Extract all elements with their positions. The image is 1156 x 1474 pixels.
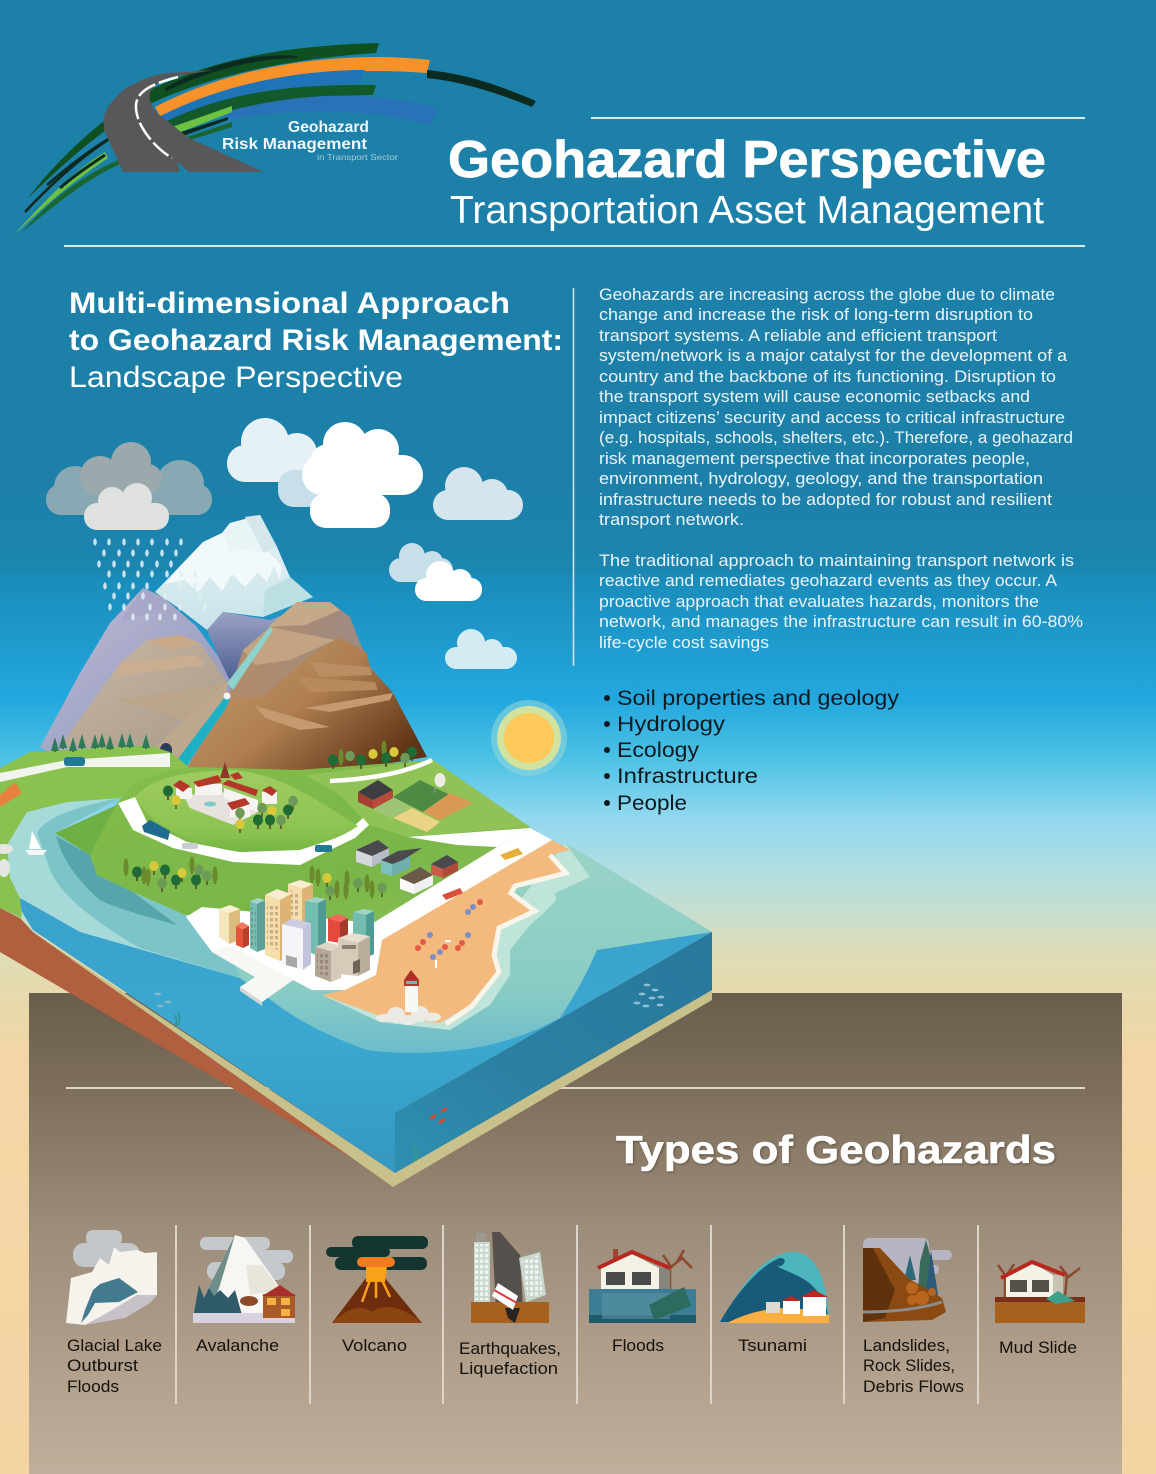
river deep channel bbox=[56, 836, 177, 925]
mountain: snow peak bbox=[155, 515, 313, 630]
heading: multi-dimensional approach bbox=[69, 287, 563, 394]
text block: introduction paragraphs: impact citizens’ security and access to critical infrastructure bbox=[599, 409, 1065, 427]
mountain: brown front bbox=[187, 637, 427, 777]
sailboat bbox=[25, 831, 47, 855]
icon: volcano bbox=[326, 1236, 428, 1323]
hilltop estate bbox=[173, 762, 277, 825]
waterfall bbox=[173, 627, 273, 775]
hazard: landslides bbox=[863, 1238, 964, 1396]
hazard: avalanche bbox=[193, 1235, 296, 1355]
bullet list: dimensions bbox=[604, 687, 900, 815]
vehicles bbox=[64, 757, 523, 900]
road: upper left bbox=[0, 753, 170, 782]
mountain: brown back bbox=[190, 602, 367, 770]
water tower bbox=[434, 773, 446, 793]
icon: landslide bbox=[863, 1238, 952, 1322]
icon: earthquake buildings bbox=[471, 1232, 549, 1323]
hazard: tsunami bbox=[720, 1252, 829, 1355]
hazard column dividers bbox=[176, 1225, 978, 1404]
hazard: glacial lake outburst floods: Glacial Lake bbox=[67, 1336, 162, 1355]
logo: Geohazard Risk Management: Risk Management bbox=[222, 136, 368, 153]
text block: introduction paragraphs: transport network. bbox=[599, 511, 744, 529]
heading: multi-dimensional approach: Multi-dimensional Approach bbox=[69, 287, 510, 320]
block: shallow teal water bbox=[190, 843, 712, 1053]
hazard: landslides: Debris Flows bbox=[863, 1377, 964, 1396]
text block: introduction paragraphs: country and the backbone of its functioning. Disruption to bbox=[599, 368, 1056, 386]
text block: introduction paragraphs: risk management perspective that incorporates people, bbox=[599, 450, 1030, 468]
road: farm branch bbox=[330, 760, 530, 847]
hazard: floods: Floods bbox=[612, 1336, 664, 1355]
bay wedge bbox=[55, 805, 140, 855]
logo: Geohazard Risk Management: in Transport Sector bbox=[317, 152, 398, 162]
cloud: low bbox=[445, 629, 517, 669]
bullet list: dimensions: Infrastructure bbox=[617, 765, 758, 788]
vertical divider bbox=[572, 288, 574, 666]
trees: behind city bbox=[309, 866, 387, 900]
icon: sun bbox=[491, 700, 567, 776]
hazard: landslides: Landslides, bbox=[863, 1336, 950, 1355]
hazard: mud slide: Mud Slide bbox=[999, 1338, 1077, 1357]
clouds group bbox=[46, 418, 523, 669]
mountain: dark lilac back bbox=[207, 612, 290, 685]
beach bbox=[322, 840, 570, 1023]
icon: avalanche mountain and house bbox=[193, 1235, 296, 1323]
text block: introduction paragraphs: transport systems. A reliable and efficient transport bbox=[599, 327, 997, 345]
farm bbox=[373, 780, 473, 832]
main land bbox=[90, 760, 530, 940]
beach wet band bbox=[322, 843, 590, 1030]
mountain: lilac bbox=[40, 588, 240, 760]
text block: introduction paragraphs bbox=[599, 286, 1083, 652]
hazard: glacial lake outburst floods bbox=[66, 1230, 162, 1396]
village houses bbox=[356, 840, 458, 894]
text block: introduction paragraphs: infrastructure needs to be adopted for robust and resilient bbox=[599, 491, 1052, 509]
upper right meadow bbox=[305, 760, 530, 837]
text block: introduction paragraphs: system/network is a major catalyst for the development of a bbox=[599, 347, 1068, 365]
bullet list: dimensions: Ecology bbox=[617, 739, 700, 762]
text block: introduction paragraphs: life-cycle cost savings bbox=[599, 634, 769, 652]
tunnel bbox=[160, 743, 172, 757]
header rule top bbox=[591, 117, 1085, 119]
block: layered landscape cross-section bbox=[0, 733, 712, 1187]
hazard: mud slide bbox=[995, 1262, 1085, 1357]
hazard: earthquakes: Liquefaction bbox=[459, 1359, 558, 1378]
trees: hill bbox=[163, 786, 298, 833]
lighthouse with rocks bbox=[376, 970, 441, 1025]
cloud: small pair bbox=[389, 543, 482, 601]
text block: introduction paragraphs: (e.g. hospitals, schools, shelters, etc.). Therefore, a geohazard bbox=[599, 429, 1073, 447]
text block: introduction paragraphs: Geohazards are increasing across the globe due to climate bbox=[599, 286, 1055, 304]
text block: introduction paragraphs: reactive and remediates geohazard events as they occur. A bbox=[599, 572, 1057, 590]
text block: introduction paragraphs: the transport system will cause economic setbacks and bbox=[599, 388, 1030, 406]
pier bbox=[212, 945, 293, 1006]
hazard: glacial lake outburst floods: Outburst bbox=[67, 1356, 138, 1375]
trees: upper road bbox=[51, 733, 150, 752]
logo: Geohazard Risk Management: Geohazard bbox=[288, 119, 369, 136]
cloud: dark rain cloud bbox=[46, 442, 212, 530]
icon: house in mud bbox=[995, 1262, 1085, 1323]
text block: introduction paragraphs: change and increase the risk of long-term disruption to bbox=[599, 306, 1033, 324]
heading: multi-dimensional approach: to Geohazard Risk Management: bbox=[69, 324, 563, 357]
river mid channel bbox=[37, 798, 240, 978]
tan foreground rock bbox=[153, 683, 227, 775]
title: Geohazard Perspective bbox=[448, 131, 1046, 189]
text block: introduction paragraphs: The traditional approach to maintaining transport network is bbox=[599, 552, 1074, 570]
city base bbox=[186, 907, 382, 1002]
hazard: volcano bbox=[326, 1236, 428, 1355]
heading: multi-dimensional approach: Landscape Perspective bbox=[69, 361, 403, 394]
block: sand layer bbox=[33, 932, 712, 1187]
block: right water face bbox=[395, 932, 712, 1173]
hazard: landslides: Rock Slides, bbox=[863, 1356, 955, 1375]
hazard: earthquakes: Earthquakes, bbox=[459, 1339, 561, 1358]
cloud: right bbox=[433, 467, 523, 520]
trees: left of city bbox=[123, 856, 218, 892]
river and bay bbox=[7, 798, 240, 978]
city buildings bbox=[219, 880, 374, 982]
logo: Geohazard Risk Management bbox=[13, 43, 536, 236]
red barn bbox=[358, 780, 393, 809]
bullet list: dimensions: People bbox=[617, 792, 687, 815]
icon: glacier and lake bbox=[66, 1230, 157, 1325]
left bank land bbox=[0, 745, 190, 918]
block: red soil layer bbox=[0, 908, 393, 1187]
bullet list: dimensions: Hydrology bbox=[617, 713, 726, 736]
icon: flooded house bbox=[589, 1249, 696, 1323]
hill with road bbox=[118, 797, 369, 865]
hazard: glacial lake outburst floods: Floods bbox=[67, 1377, 119, 1396]
hazard: floods bbox=[589, 1249, 696, 1355]
hazard: avalanche: Avalanche bbox=[196, 1336, 279, 1355]
hazard: earthquakes bbox=[459, 1232, 561, 1378]
header rule bottom bbox=[64, 245, 1085, 247]
icon: tsunami wave bbox=[720, 1252, 829, 1323]
cloud: white large group bbox=[227, 418, 423, 528]
trees: brown mountain foot bbox=[328, 740, 417, 769]
mountains bbox=[40, 515, 427, 777]
bullet list: dimensions: Soil properties and geology bbox=[617, 687, 900, 710]
hill bbox=[135, 770, 358, 852]
divider lines of panel bbox=[66, 1087, 1085, 1089]
text block: introduction paragraphs: proactive approach that evaluates hazards, monitors the bbox=[599, 593, 1039, 611]
subtitle: Transportation Asset Management bbox=[450, 189, 1044, 232]
block: water surface and left face bbox=[18, 843, 712, 1173]
fish and seaweed bbox=[154, 984, 664, 1161]
hazard: volcano: Volcano bbox=[342, 1336, 407, 1355]
panel: types of geohazards background bbox=[29, 993, 1122, 1474]
text block: introduction paragraphs: environment, hydrology, geology, and the transportation bbox=[599, 470, 1043, 488]
shore rocks bbox=[0, 844, 13, 877]
foam line bbox=[446, 855, 566, 1024]
road along beach bbox=[373, 828, 552, 940]
tent bbox=[0, 782, 22, 806]
heading: types of geohazards: Types of Geohazards bbox=[616, 1129, 1056, 1172]
beach umbrellas bbox=[415, 899, 483, 968]
hazard: tsunami: Tsunami bbox=[738, 1336, 807, 1355]
mountain: tan bbox=[60, 635, 228, 750]
text block: introduction paragraphs: network, and manages the infrastructure can result in 60-80% bbox=[599, 613, 1083, 631]
rain drops bbox=[93, 538, 207, 621]
